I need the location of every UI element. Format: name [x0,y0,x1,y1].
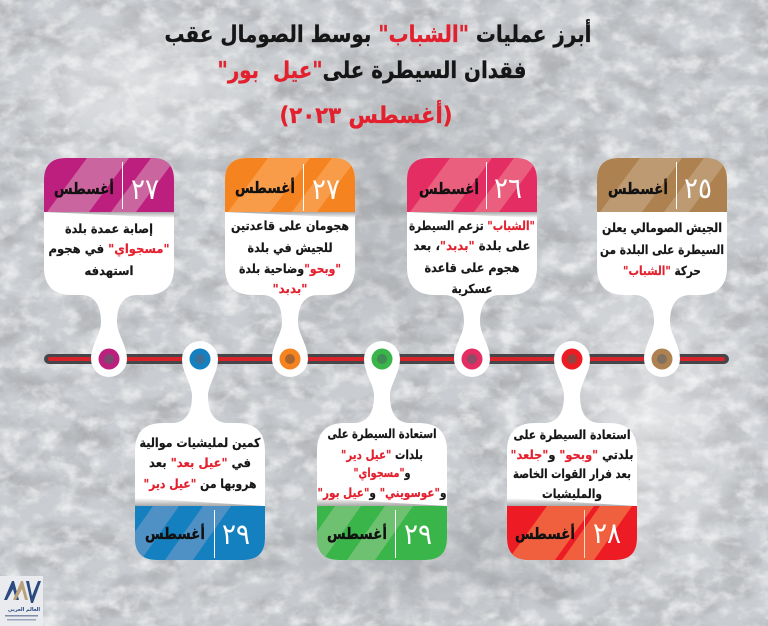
card: 28 August, Wabho and Jalad: بعد فرار القوات الخاصة [513,466,631,481]
card: 25 August, army control: حركة "الشباب" [623,263,701,278]
card: 27 August, mayor [44,158,176,377]
card: 25 August, army control: السيطرة على البلدة من [600,242,724,257]
card: 28 August, Wabho and Jalad: ٢٨ [593,516,621,550]
card: 27 August, mayor: ٢٧ [131,172,159,206]
card: 27 August, mayor: أغسطس [54,179,114,198]
card: 29 August, ambush: ٢٩ [222,517,250,551]
title: (أغسطس ٢٠٢٣) [280,99,452,129]
card: 25 August, army control: أغسطس [608,179,668,198]
card: 27 August, two bases: هجومان على قاعدتين [231,218,349,233]
card: 29 August, ambush: في "عيل بعد" بعد [149,455,251,470]
card: 26 August, Shabab seize Badbad [407,158,539,377]
card: 26 August, Shabab seize Badbad: أغسطس [419,179,479,198]
title: أبرز عمليات "الشباب" بوسط الصومال عقب [164,18,592,48]
logo [0,576,43,626]
card: 29 August, towns regained: بلدات "عيل دير" [341,447,423,462]
card: 29 August, towns regained: ٢٩ [404,517,432,551]
card: 27 August, mayor: استهدفه [84,263,134,278]
card: 29 August, ambush: أغسطس [145,524,205,543]
card: 25 August, army control: الجيش الصومالي يعلن [602,220,722,235]
card: 25 August, army control: ٢٥ [684,171,712,205]
card: 28 August, Wabho and Jalad: بلدتي "وبحو" و"جلعد" [510,447,634,462]
card: 25 August, army control [597,158,729,377]
card: 29 August, ambush: كمين لمليشيات موالية [140,435,261,450]
timeline bar [44,354,729,364]
card: 29 August, towns regained: أغسطس [327,524,387,543]
card: 27 August, two bases: للجيش في بلدة [248,240,332,255]
card: 29 August, ambush: هروبها من "عيل دير" [144,476,256,491]
card: 29 August, towns regained: استعادة السيطرة على [328,426,436,441]
card: 28 August, Wabho and Jalad [507,341,637,560]
card: 27 August, mayor: "مسجواي" في هجوم [48,241,170,257]
card: 28 August, Wabho and Jalad: أغسطس [515,524,575,543]
card: 29 August, towns regained: و"عوسويني" و"عيل بور" [318,485,446,500]
logo: العالم العربي [8,607,40,613]
card: 26 August, Shabab seize Badbad: ٢٦ [494,171,522,205]
card: 26 August, Shabab seize Badbad: عسكرية [452,281,492,296]
card: 27 August, mayor: إصابة عمدة بلدة [65,221,153,236]
card: 27 August, two bases: "بدبد" [272,281,308,296]
card: 27 August, two bases: أغسطس [235,178,295,197]
card: 29 August, towns regained: و"مسجواي" [353,465,411,480]
card: 29 August, ambush [135,341,265,560]
card: 26 August, Shabab seize Badbad: "الشباب" تزعم السيطرة [409,218,535,233]
card: 27 August, two bases: ٢٧ [312,172,340,206]
card: 27 August, two bases: "وبحو"وضاحية بلدة [239,261,341,276]
card: 26 August, Shabab seize Badbad: على بلدة "بدبد"، بعد [414,238,530,253]
card: 26 August, Shabab seize Badbad: هجوم على قاعدة [424,260,520,276]
card: 28 August, Wabho and Jalad: والمليشيات [542,486,602,501]
card: 28 August, Wabho and Jalad: استعادة السيطرة على [514,427,630,442]
title [164,18,592,129]
title: فقدان السيطرة على"عيل بور" [218,58,526,84]
card: 27 August, two bases [225,158,357,377]
card: 29 August, towns regained [317,341,447,560]
